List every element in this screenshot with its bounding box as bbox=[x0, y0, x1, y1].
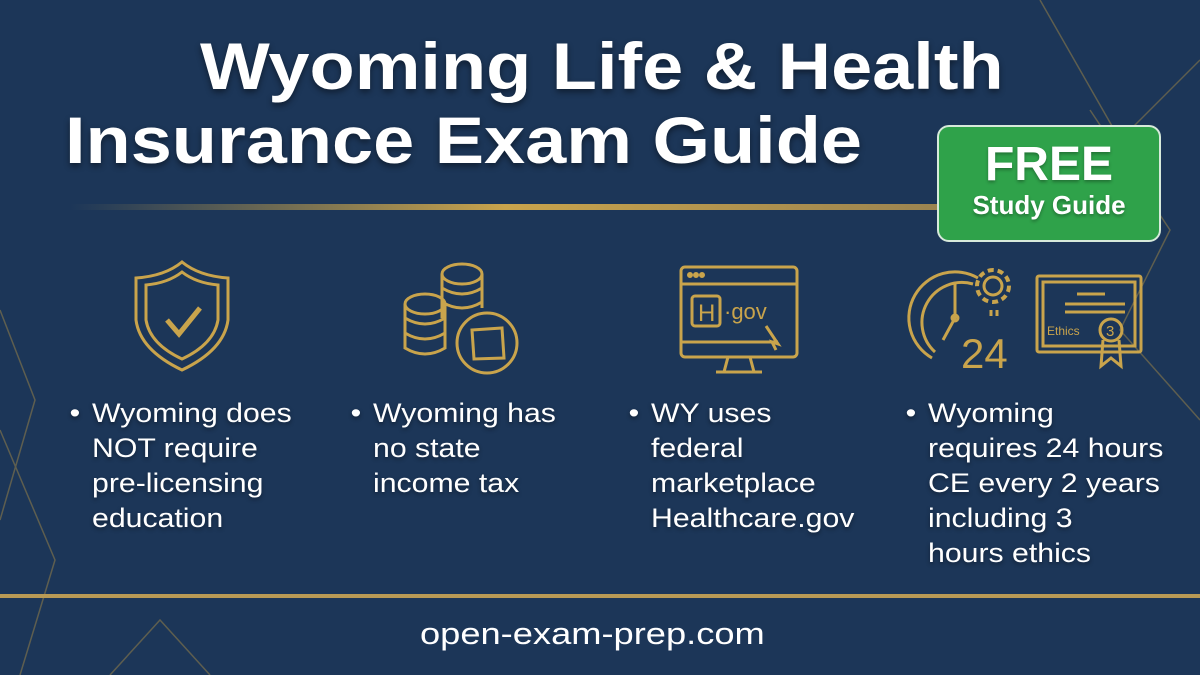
text: col 4: CE every 2 years bbox=[928, 468, 1160, 498]
bottom gold line bbox=[0, 594, 1200, 598]
text: col 3: Healthcare.gov bbox=[651, 503, 854, 533]
badge: free study guide: FREE bbox=[985, 138, 1113, 191]
text: col 4: hours ethics bbox=[928, 538, 1091, 568]
icon: shield bbox=[134, 260, 230, 372]
text: col 2: Wyoming has bbox=[373, 398, 556, 428]
text: col 3: marketplace bbox=[651, 468, 816, 498]
text: col 4 bbox=[906, 398, 1163, 568]
title: Wyoming Life & Health bbox=[200, 29, 1004, 103]
text: • bbox=[906, 398, 916, 428]
text: col 4: requires 24 hours bbox=[928, 433, 1163, 463]
footer url: open-exam-prep.com bbox=[420, 616, 765, 651]
icon: computer healthcare.gov: H bbox=[698, 300, 715, 327]
text: • bbox=[70, 398, 80, 428]
icon: clock 24 with gear and ethics certificate bbox=[907, 268, 1142, 374]
text: col 4: Wyoming bbox=[928, 398, 1054, 428]
icon: clock 24 with gear and ethics certificate: Ethics bbox=[1047, 324, 1080, 338]
gold divider bbox=[70, 204, 940, 210]
text: col 3: WY uses bbox=[651, 398, 771, 428]
text: col 1: education bbox=[92, 503, 223, 533]
text: col 2: income tax bbox=[373, 468, 519, 498]
badge: free study guide bbox=[937, 125, 1161, 242]
text: col 1: NOT require bbox=[92, 433, 258, 463]
text: col 1: Wyoming does bbox=[92, 398, 292, 428]
text: col 3: federal bbox=[651, 433, 743, 463]
text: col 3 bbox=[629, 398, 854, 536]
text: col 1: pre-licensing bbox=[92, 468, 263, 498]
text: col 4: including 3 bbox=[928, 503, 1073, 533]
title: Insurance Exam Guide bbox=[65, 103, 862, 177]
text: col 1 bbox=[70, 398, 292, 533]
text: • bbox=[629, 398, 639, 428]
badge: free study guide: Study Guide bbox=[972, 190, 1126, 220]
text: • bbox=[351, 398, 361, 428]
text: col 2 bbox=[351, 398, 556, 498]
icon: computer healthcare.gov bbox=[680, 266, 798, 374]
title bbox=[65, 29, 1004, 177]
icon: computer healthcare.gov: ·gov bbox=[724, 299, 767, 324]
icon: coins bbox=[404, 262, 518, 374]
text: col 2: no state bbox=[373, 433, 481, 463]
icon: clock 24 with gear and ethics certificate: 3 bbox=[1106, 323, 1114, 340]
